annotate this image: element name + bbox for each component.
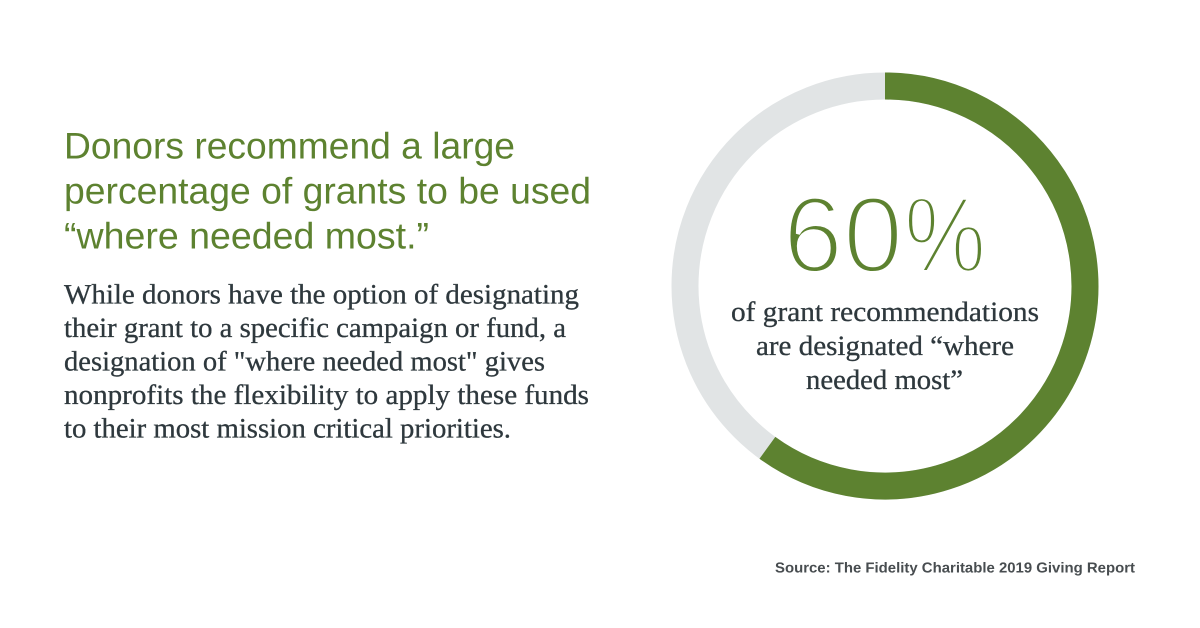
heading: “where needed most.” [64, 216, 429, 256]
heading [64, 126, 591, 256]
source: Source: The Fidelity Charitable 2019 Giving Report [775, 560, 1135, 576]
body text: to their most mission critical priorities. [64, 414, 511, 444]
body text: While donors have the option of designating [64, 280, 579, 310]
body text: their grant to a specific campaign or fund, a [64, 313, 567, 344]
big percentage [783, 174, 986, 295]
donut caption [731, 297, 1039, 396]
donut chart: 60 percent [685, 86, 1085, 486]
donut caption: are designated “where [756, 331, 1014, 362]
body text [64, 280, 589, 444]
body text: designation of "where needed most" gives [64, 346, 545, 378]
heading: percentage of grants to be used [64, 170, 591, 212]
donut caption: needed most” [806, 365, 963, 396]
big percentage: % [904, 174, 986, 295]
body text: nonprofits the flexibility to apply these funds [64, 380, 589, 411]
donut caption: of grant recommendations [731, 297, 1039, 328]
big percentage: 0 [843, 174, 903, 295]
heading: Donors recommend a large [64, 126, 515, 166]
big percentage: 6 [783, 174, 843, 295]
